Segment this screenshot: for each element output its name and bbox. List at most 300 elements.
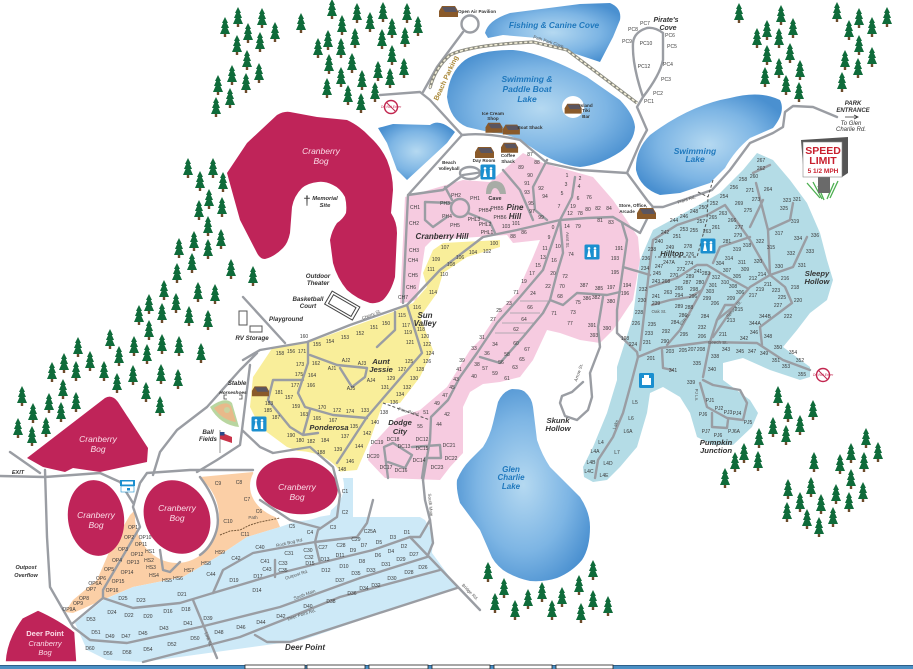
site numbers: Deer Point: D32 (371, 583, 381, 589)
site numbers: Pine Hill and Cranberry Hill: 0 (552, 225, 555, 231)
site numbers: Pine Hill and Cranberry Hill: PHB6 (493, 215, 507, 221)
site numbers: Pine Hill and Cranberry Hill: 64 (521, 317, 527, 323)
site numbers: Pine Hill and Cranberry Hill: 390 (603, 326, 611, 332)
site numbers: Hilltop and Sleepy Hollow: 340 (708, 367, 716, 373)
bog labels: Bog (289, 492, 305, 502)
site numbers: Deer Point: D23 (136, 598, 146, 604)
site numbers: Lake loop and Pumpkin Junction: L4D (603, 461, 613, 467)
site numbers: Hilltop and Sleepy Hollow: 208 (697, 347, 705, 353)
site numbers: Outpost and Cranberry sites: OP9 (73, 601, 83, 607)
site numbers: Pine Hill and Cranberry Hill: 196 (621, 291, 629, 297)
site numbers: Pirate's Cove: PC10 (640, 41, 652, 47)
site numbers: Pine Hill and Cranberry Hill: 58 (504, 352, 510, 358)
road names: Oak St. (651, 309, 667, 314)
site numbers: Pine Hill and Cranberry Hill: 19 (521, 279, 527, 285)
site numbers: Pine Hill and Cranberry Hill: PH1 (470, 196, 480, 202)
site numbers: Deer Point: D28 (404, 570, 414, 576)
site numbers: Hilltop and Sleepy Hollow: 332 (787, 251, 795, 257)
site numbers: Deer Point: C3 (330, 525, 336, 531)
site numbers: Hilltop and Sleepy Hollow: 235 (648, 322, 656, 328)
facility labels: Stable (228, 380, 247, 387)
site numbers: Lake loop and Pumpkin Junction: L4E (600, 473, 609, 479)
site numbers: Pine Hill and Cranberry Hill: 386 (583, 296, 591, 302)
site numbers: Deer Point: C2 (342, 510, 348, 516)
site numbers: Pine Hill and Cranberry Hill: 70 (559, 284, 565, 290)
site numbers: Pine Hill and Cranberry Hill: 20 (550, 271, 556, 277)
site numbers: Sun Valley, Aunt Jessie and Ponderosa: 154 (326, 339, 334, 345)
site numbers: Outpost and Cranberry sites: C11 (241, 532, 250, 538)
bog: horseshoe Cranberry Bog (227, 112, 397, 303)
site numbers: Hilltop and Sleepy Hollow: 253 (680, 227, 688, 233)
site numbers: Pine Hill and Cranberry Hill: 38 (474, 362, 480, 368)
site numbers: Pine Hill and Cranberry Hill: 13 (540, 255, 546, 261)
area name labels: Valley (414, 319, 437, 328)
site numbers: Pine Hill and Cranberry Hill: 3 (565, 182, 568, 188)
zone: Pine Hill, Cranberry Hill and Dodge City (368, 153, 640, 480)
site numbers: Sun Valley, Aunt Jessie and Ponderosa: 137 (341, 434, 349, 440)
site numbers: Outpost and Cranberry sites: OP12 (131, 552, 144, 558)
site numbers: Hilltop and Sleepy Hollow: 287 (683, 280, 691, 286)
site numbers: Sun Valley, Aunt Jessie and Ponderosa: 125 (405, 359, 413, 365)
site numbers: Deer Point: D54 (143, 647, 153, 653)
bog: left Cranberry Bog (27, 397, 148, 472)
site numbers: Hilltop and Sleepy Hollow: 342 (740, 336, 748, 342)
site numbers: Pine Hill and Cranberry Hill: 5 (561, 191, 564, 197)
building labels: Boat Shack (517, 125, 543, 130)
site numbers: Hilltop and Sleepy Hollow: 263 (664, 290, 672, 296)
site numbers: Pine Hill and Cranberry Hill: 33 (471, 346, 477, 352)
site numbers: Sun Valley, Aunt Jessie and Ponderosa: 175 (295, 372, 303, 378)
site numbers: Outpost and Cranberry sites: HS7 (184, 568, 194, 574)
site numbers: Pine Hill and Cranberry Hill: 71 (513, 290, 519, 296)
site numbers: Hilltop and Sleepy Hollow: 330 (775, 264, 783, 270)
site numbers: Lake loop and Pumpkin Junction: PJ3 (724, 410, 733, 416)
site numbers: Pine Hill and Cranberry Hill: PH2 (451, 193, 461, 199)
site numbers: Deer Point: C42 (231, 556, 241, 562)
site numbers: Sun Valley, Aunt Jessie and Ponderosa: 146 (346, 459, 354, 465)
site numbers: Pine Hill and Cranberry Hill: 391 (588, 323, 596, 329)
site numbers: Pine Hill and Cranberry Hill: 2 (579, 176, 582, 182)
lake labels: Fishing & Canine Cove (509, 20, 600, 30)
site numbers: Hilltop and Sleepy Hollow: 247 (655, 264, 663, 270)
lake: Glen Charlie (457, 389, 590, 581)
road names: South Main (293, 588, 317, 601)
area name labels: Hilltop (660, 249, 684, 258)
site numbers: Hilltop and Sleepy Hollow: 207 (688, 347, 696, 353)
site numbers: Deer Point: D34 (359, 586, 369, 592)
site numbers: Sun Valley, Aunt Jessie and Ponderosa: 188 (317, 450, 325, 456)
site numbers: Outpost and Cranberry sites: OP14 (121, 570, 134, 576)
site numbers: Hilltop and Sleepy Hollow: 268 (662, 279, 670, 285)
site numbers: Pine Hill and Cranberry Hill: 14 (564, 224, 570, 230)
site numbers: Hilltop and Sleepy Hollow: 231 (643, 340, 651, 346)
icon: do not enter east (813, 368, 834, 382)
site numbers: Pine Hill and Cranberry Hill: 55 (417, 424, 423, 430)
site numbers: Deer Point: D51 (91, 630, 101, 636)
site numbers: Pine Hill and Cranberry Hill: 380 (607, 299, 615, 305)
site numbers: Hilltop and Sleepy Hollow: 205 (679, 348, 687, 354)
site numbers: Sun Valley, Aunt Jessie and Ponderosa: 121 (406, 340, 414, 346)
site numbers: Sun Valley, Aunt Jessie and Ponderosa: 100 (490, 241, 498, 247)
site numbers: Dodge City: DC19 (371, 440, 384, 446)
site numbers: Hilltop and Sleepy Hollow: 216 (781, 276, 789, 282)
site numbers: Hilltop and Sleepy Hollow: 215 (735, 307, 743, 313)
site numbers: Deer Point: C5 (289, 524, 295, 530)
site numbers: Deer Point: C30 (303, 548, 313, 554)
road names: Pine Road (398, 406, 420, 417)
site numbers: Dodge City: DC16 (395, 468, 408, 474)
site numbers: Hilltop and Sleepy Hollow: 353 (782, 364, 790, 370)
lake labels: Lake (517, 94, 537, 104)
site numbers: Outpost and Cranberry sites: OP11 (135, 542, 147, 548)
site numbers: Sun Valley, Aunt Jessie and Ponderosa: 129 (387, 376, 395, 382)
site numbers: Hilltop and Sleepy Hollow: 276 (686, 252, 694, 258)
site numbers: Deer Point: D22 (124, 613, 134, 619)
site numbers: Pine Hill and Cranberry Hill: PHL2 (479, 222, 491, 228)
site numbers: Outpost and Cranberry sites: HS1 (145, 549, 155, 555)
site numbers: Sun Valley, Aunt Jessie and Ponderosa: 190 (287, 433, 295, 439)
site numbers: Deer Point: D44 (256, 620, 266, 626)
site numbers: Deer Point: D8 (359, 559, 365, 565)
road names (203, 34, 743, 647)
site numbers: Deer Point: D42 (276, 614, 286, 620)
site numbers: Sun Valley, Aunt Jessie and Ponderosa: 131 (381, 385, 389, 391)
site numbers: Pine Hill and Cranberry Hill: 76 (586, 195, 592, 201)
site numbers: Sun Valley, Aunt Jessie and Ponderosa: 185 (264, 408, 272, 414)
site numbers: Sun Valley, Aunt Jessie and Ponderosa: 182 (307, 439, 315, 445)
site numbers: Lake loop and Pumpkin Junction: L4C (584, 469, 594, 475)
site numbers: Sun Valley, Aunt Jessie and Ponderosa: 184 (321, 438, 329, 444)
site numbers: Deer Point: D14 (252, 588, 262, 594)
site numbers: Deer Point: D37 (335, 578, 345, 584)
site numbers: Hilltop and Sleepy Hollow: 243 (652, 279, 660, 285)
site numbers: Hilltop and Sleepy Hollow (621, 158, 819, 386)
site numbers: Sun Valley, Aunt Jessie and Ponderosa: 128 (416, 367, 424, 373)
site numbers: Lake loop and Pumpkin Junction: L4B (587, 460, 596, 466)
site numbers: Hilltop and Sleepy Hollow: 307 (723, 268, 731, 274)
site numbers: Deer Point: D60 (85, 646, 95, 652)
site numbers: Sun Valley, Aunt Jessie and Ponderosa: 150 (382, 321, 390, 327)
site numbers: Hilltop and Sleepy Hollow: 239 (652, 301, 660, 307)
site numbers: Pine Hill and Cranberry Hill: 83 (608, 220, 614, 226)
site numbers: Pine Hill and Cranberry Hill: 47 (442, 393, 448, 399)
site numbers: Pine Hill and Cranberry Hill: PHB4 (478, 208, 492, 214)
site numbers: Hilltop and Sleepy Hollow: 220 (794, 298, 802, 304)
site numbers: Hilltop and Sleepy Hollow: 290 (661, 339, 669, 345)
site numbers: Sun Valley, Aunt Jessie and Ponderosa: 111 (427, 267, 435, 273)
facility labels: Playground (269, 316, 303, 323)
bog labels: Cranberry (79, 434, 118, 444)
site numbers: Hilltop and Sleepy Hollow: 246 (680, 214, 688, 220)
site numbers: Deer Point: D29 (396, 557, 406, 563)
site numbers: Hilltop and Sleepy Hollow: 280 (696, 280, 704, 286)
site numbers: Pine Hill and Cranberry Hill: 94 (542, 194, 548, 200)
site numbers: Outpost and Cranberry sites: C6 (256, 509, 262, 515)
site numbers: Pine Hill and Cranberry Hill: 93 (524, 190, 530, 196)
site numbers: Hilltop and Sleepy Hollow: 309 (741, 267, 749, 273)
site numbers: Dodge City: DC15 (416, 446, 429, 452)
site numbers: Pine Hill and Cranberry Hill: 60 (513, 341, 519, 347)
site numbers: Deer Point: D52 (167, 642, 177, 648)
site numbers: Pine Hill and Cranberry Hill: 44 (436, 422, 442, 428)
site numbers: Sun Valley, Aunt Jessie and Ponderosa: 108 (447, 262, 455, 268)
site numbers: Pirate's Cove: PC8 (628, 27, 638, 33)
site numbers: Hilltop and Sleepy Hollow: 335 (693, 361, 701, 367)
trees: north (313, 0, 423, 113)
site numbers: Sun Valley, Aunt Jessie and Ponderosa: 102 (483, 249, 491, 255)
road names: PJ Ln. (694, 389, 699, 401)
building labels: Ice Cream (482, 111, 504, 116)
buildings (252, 6, 656, 396)
site numbers: Pine Hill and Cranberry Hill: 99 (538, 215, 544, 221)
site numbers: Sun Valley, Aunt Jessie and Ponderosa: 138 (380, 410, 388, 416)
site numbers: Deer Point: D45 (138, 631, 148, 637)
site numbers: Deer Point: C31 (284, 551, 294, 557)
cave (486, 181, 506, 194)
zone: Sun Valley, Aunt Jessie and Ponderosa (250, 240, 500, 472)
beach path (430, 42, 637, 103)
area name labels: Pirate's (653, 17, 679, 24)
icon: do not enter north (381, 100, 402, 114)
site numbers: Pine Hill and Cranberry Hill: 77 (567, 321, 573, 327)
site numbers: Hilltop and Sleepy Hollow: 333 (806, 249, 814, 255)
site numbers: Pine Hill and Cranberry Hill: 101 (512, 221, 520, 227)
site numbers: Deer Point: C4 (307, 530, 313, 536)
site numbers: Pine Hill and Cranberry Hill: 88 (534, 160, 540, 166)
site numbers: Outpost and Cranberry sites: C10 (223, 519, 233, 525)
site numbers: Hilltop and Sleepy Hollow: 350 (774, 345, 782, 351)
site numbers: Pine Hill and Cranberry Hill: CH1 (410, 205, 420, 211)
bog: ellipse west (63, 476, 129, 560)
lake: Swimming Lake (636, 94, 782, 195)
site numbers: Pine Hill and Cranberry Hill: 67 (524, 347, 530, 353)
bog labels: Bog (88, 520, 104, 530)
site numbers: Sun Valley, Aunt Jessie and Ponderosa: 126 (423, 359, 431, 365)
site numbers: Sun Valley, Aunt Jessie and Ponderosa: AJ5 (347, 386, 356, 392)
site numbers: Deer Point: C29 (351, 537, 361, 543)
site numbers: Dodge City: DC18 (387, 437, 400, 443)
site numbers: Deer Point: C28 (336, 543, 346, 549)
site numbers: Hilltop and Sleepy Hollow: 292 (662, 329, 670, 335)
site numbers: Sun Valley, Aunt Jessie and Ponderosa: 183 (265, 401, 273, 407)
site numbers: Hilltop and Sleepy Hollow: 255 (690, 228, 698, 234)
site numbers: Hilltop and Sleepy Hollow: 213 (727, 318, 735, 324)
site numbers: Hilltop and Sleepy Hollow: 315 (767, 245, 775, 251)
site numbers: Outpost and Cranberry sites: HS6 (173, 576, 183, 582)
site numbers: Sun Valley, Aunt Jessie and Ponderosa: 180 (296, 438, 304, 444)
site numbers: Pine Hill and Cranberry Hill: 7 (558, 204, 561, 210)
park entrance label (836, 101, 871, 133)
road names: Bridge Rd. (461, 583, 479, 601)
site numbers: Pine Hill and Cranberry Hill: 25 (496, 308, 502, 314)
site numbers: Hilltop and Sleepy Hollow: 260 (750, 174, 758, 180)
dashed paths (383, 180, 713, 420)
site numbers: Hilltop and Sleepy Hollow: 198 (621, 336, 629, 342)
site numbers: Pine Hill and Cranberry Hill: PH4 (442, 214, 452, 220)
site numbers: Deer Point: C1 (342, 489, 348, 495)
site numbers: Pirate's Cove: PC7 (640, 21, 650, 27)
site numbers: Dodge City: DC22 (445, 456, 458, 462)
site numbers: Outpost and Cranberry sites: OP1 (128, 525, 138, 531)
site numbers: Deer Point: D43 (159, 626, 169, 632)
site numbers: Hilltop and Sleepy Hollow: 261 (712, 225, 720, 231)
facility labels: RV Storage (235, 335, 269, 342)
lake labels: Glen (502, 465, 520, 474)
area name labels: Skunk (546, 416, 570, 425)
site numbers: Hilltop and Sleepy Hollow: 218 (791, 285, 799, 291)
site numbers: Pine Hill and Cranberry Hill: 31 (479, 335, 485, 341)
site numbers: Pine Hill and Cranberry Hill: 40 (471, 374, 477, 380)
site numbers: Lake loop and Pumpkin Junction: L6 (628, 416, 634, 422)
bog: ellipse centre with halo (131, 468, 223, 566)
facility labels: Outpost (15, 565, 38, 571)
lake labels (497, 20, 717, 491)
site numbers: Deer Point: D49 (105, 634, 115, 640)
site numbers: Pine Hill and Cranberry Hill: 75 (575, 300, 581, 306)
site numbers: Hilltop and Sleepy Hollow: 203 (666, 349, 674, 355)
site numbers: Hilltop and Sleepy Hollow: 321 (793, 197, 801, 203)
facility labels: EXIT (12, 470, 25, 476)
site numbers: Outpost and Cranberry sites: OP8 (79, 596, 89, 602)
site numbers: Hilltop and Sleepy Hollow: 211 (719, 332, 727, 338)
site numbers: Hilltop and Sleepy Hollow: 311 (738, 260, 746, 266)
facility labels (12, 273, 331, 579)
site numbers: Lake loop and Pumpkin Junction: PJ4 (733, 411, 742, 417)
site numbers: Dodge City: DC12 (416, 437, 429, 443)
site numbers: Dodge City: DC14 (413, 458, 426, 464)
site numbers: Hilltop and Sleepy Hollow: 232 (698, 325, 706, 331)
site numbers: Hilltop and Sleepy Hollow: 352 (796, 358, 804, 364)
site numbers: Deer Point: C33 (278, 561, 288, 567)
site numbers: Sun Valley, Aunt Jessie and Ponderosa: 142 (363, 431, 371, 437)
site numbers: Hilltop and Sleepy Hollow: 320 (754, 259, 762, 265)
site numbers: Outpost and Cranberry sites: HS9 (215, 550, 225, 556)
road names: Elm St. (678, 312, 691, 326)
facility labels: Horseshoes (219, 390, 247, 396)
site numbers: Pine Hill and Cranberry Hill: 22 (545, 284, 551, 290)
area name labels: Sleepy (805, 269, 830, 278)
site numbers: Deer Point: D24 (107, 610, 117, 616)
site numbers: Hilltop and Sleepy Hollow: 230 (638, 298, 646, 304)
site numbers: Deer Point: D18 (181, 607, 191, 613)
site numbers: Hilltop and Sleepy Hollow: 274 (685, 261, 693, 267)
area name labels: Dodge (388, 418, 413, 427)
lake labels: Lake (685, 154, 705, 164)
site numbers: Sun Valley, Aunt Jessie and Ponderosa: 115 (398, 313, 406, 319)
site numbers: Lake loop and Pumpkin Junction: PJ6 (699, 412, 708, 418)
site numbers: Pine Hill and Cranberry Hill: 6 (577, 196, 580, 202)
site numbers: Hilltop and Sleepy Hollow: 341 (669, 368, 677, 374)
trees: north west (211, 7, 306, 117)
site numbers: Pine Hill and Cranberry Hill: 41 (456, 367, 462, 373)
site numbers: Hilltop and Sleepy Hollow: 281 (723, 239, 731, 245)
site numbers: Hilltop and Sleepy Hollow: 310 (721, 280, 729, 286)
site numbers: Pine Hill and Cranberry Hill: 89 (518, 165, 524, 171)
site numbers: Deer Point: D7 (361, 543, 367, 549)
site numbers: Hilltop and Sleepy Hollow: 319 (791, 219, 799, 225)
site numbers: Sun Valley, Aunt Jessie and Ponderosa: 118 (417, 327, 425, 333)
site numbers: Hilltop and Sleepy Hollow: 227 (774, 303, 782, 309)
site numbers: Hilltop and Sleepy Hollow: 228 (635, 310, 643, 316)
icon: do not enter east: Do Not Enter (813, 373, 834, 377)
road names: Rock Bog Rd. (276, 537, 304, 548)
site numbers: Hilltop and Sleepy Hollow: 241 (652, 294, 660, 300)
site numbers: Pine Hill and Cranberry Hill: 39 (459, 358, 465, 364)
site numbers: Pine Hill and Cranberry Hill: 385 (595, 286, 603, 292)
facility labels: Outdoor (306, 273, 331, 280)
area name labels: Hollow (545, 424, 572, 433)
site numbers: Pine Hill and Cranberry Hill: 24 (530, 291, 536, 297)
site numbers: Sun Valley, Aunt Jessie and Ponderosa: 139 (334, 447, 342, 453)
lake: Swimming and Paddle Boat (447, 50, 635, 167)
bottom window strip (0, 665, 913, 669)
site numbers: Hilltop and Sleepy Hollow: 351 (772, 358, 780, 364)
site numbers: Lake loop and Pumpkin Junction: L4A (591, 449, 600, 455)
site numbers: Lake loop and Pumpkin Junction: L5 (632, 400, 638, 406)
building labels: Arcade (619, 209, 635, 214)
site numbers: Pine Hill and Cranberry Hill: CH5 (408, 273, 418, 279)
site numbers: Hilltop and Sleepy Hollow: 354 (789, 350, 797, 356)
building labels: Coffee (501, 153, 516, 158)
site numbers: Deer Point: D36 (347, 591, 357, 597)
building labels: Island (579, 103, 593, 108)
site numbers: Pirate's Cove (622, 21, 677, 105)
site numbers: Sun Valley, Aunt Jessie and Ponderosa: 148 (338, 467, 346, 473)
site numbers: Hilltop and Sleepy Hollow: 263 (703, 229, 711, 235)
site numbers: Sun Valley, Aunt Jessie and Ponderosa: 172 (333, 408, 341, 414)
area name labels: City (393, 427, 408, 436)
site numbers: Hilltop and Sleepy Hollow: 288 (685, 305, 693, 311)
flag (220, 430, 232, 453)
speed limit sign: SPEED (805, 145, 841, 157)
site numbers: Hilltop and Sleepy Hollow: 336 (811, 233, 819, 239)
site numbers: Pine Hill and Cranberry Hill: 80 (585, 207, 591, 213)
building labels: Shack (501, 159, 515, 164)
site numbers: Pine Hill and Cranberry Hill: 59 (492, 371, 498, 377)
site numbers: Deer Point: D46 (236, 625, 246, 631)
site numbers: Deer Point: D19 (229, 578, 239, 584)
site numbers: Lake loop and Pumpkin Junction: PJ6A (728, 429, 741, 435)
site numbers: Pine Hill and Cranberry Hill: 73 (570, 310, 576, 316)
icon: do not enter north: Do Not Enter (381, 105, 402, 109)
site numbers: Sun Valley, Aunt Jessie and Ponderosa: AJ2 (342, 358, 351, 364)
site numbers: Pine Hill and Cranberry Hill: 87 (527, 152, 533, 158)
restroom icons (252, 164, 716, 432)
site numbers: Hilltop and Sleepy Hollow: 206 (698, 334, 706, 340)
site numbers: Sun Valley, Aunt Jessie and Ponderosa: 130 (410, 376, 418, 382)
site numbers: Pine Hill and Cranberry Hill: 15 (535, 263, 541, 269)
area name labels: Hill (509, 212, 522, 221)
facility labels: Fields (199, 436, 217, 443)
site numbers: Pine Hill and Cranberry Hill: 103 (502, 224, 510, 230)
site numbers: Pine Hill and Cranberry Hill: 4 (578, 184, 581, 190)
memorial site label: Memorial (312, 196, 338, 202)
site numbers: Sun Valley, Aunt Jessie and Ponderosa: 164 (308, 373, 316, 379)
site numbers: Deer Point: D50 (190, 636, 200, 642)
site numbers: Pine Hill and Cranberry Hill: 43 (453, 377, 459, 383)
site numbers: Sun Valley, Aunt Jessie and Ponderosa: 109 (432, 257, 440, 263)
site numbers: Hilltop and Sleepy Hollow: 338 (711, 354, 719, 360)
site numbers: Hilltop and Sleepy Hollow: 275 (744, 208, 752, 214)
site numbers: Dodge City: DC23 (431, 465, 444, 471)
site numbers: Hilltop and Sleepy Hollow: 245 (653, 271, 661, 277)
site numbers: Hilltop and Sleepy Hollow: 238 (648, 247, 656, 253)
site numbers: Hilltop and Sleepy Hollow: 249 (666, 245, 674, 251)
site numbers: Lake loop and Pumpkin Junction: PJ7 (702, 429, 711, 435)
site numbers: Outpost and Cranberry sites: OP7 (86, 587, 96, 593)
road names: Link St. (203, 632, 213, 647)
site numbers: Pirate's Cove: PC6 (665, 33, 675, 39)
